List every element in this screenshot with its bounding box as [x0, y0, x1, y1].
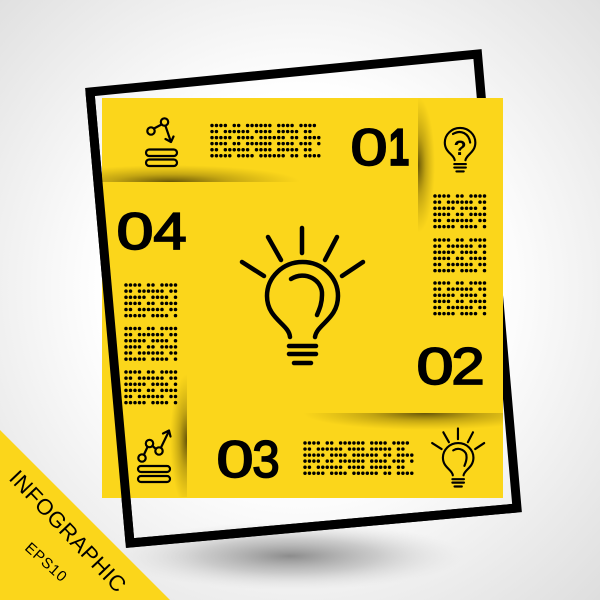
floor shadow [115, 522, 465, 590]
icon 01: nodes and arrow with stacked bars [146, 118, 177, 166]
panel shadow 01 [102, 167, 286, 182]
text placeholder 04 [126, 285, 176, 403]
number 04: 4 [153, 202, 186, 260]
ribbon subtitle: EPS10 [21, 539, 70, 585]
question bulb icon 02 [445, 128, 475, 171]
number 03: 0 [216, 430, 253, 488]
number 02: 2 [451, 338, 484, 396]
number 01: 0 [350, 118, 387, 176]
text placeholder 01 [212, 126, 319, 156]
yellow sheet [102, 98, 503, 498]
corner ribbon [0, 430, 170, 600]
bulb with rays icon 03 [432, 428, 484, 486]
number 03 [216, 430, 280, 488]
black frame [90, 54, 517, 543]
number 04 [116, 202, 186, 260]
number 01 [350, 118, 409, 176]
frame bottom edge [126, 508, 517, 543]
number 02 [416, 338, 484, 396]
number 04: 0 [116, 202, 154, 260]
panel shadow 02 [418, 104, 434, 226]
central light bulb icon [242, 228, 363, 363]
question bulb icon 02: ? [454, 137, 466, 160]
text placeholder 02 [435, 196, 485, 314]
panel shadow 03 [316, 413, 503, 428]
text placeholder 03 [305, 443, 412, 473]
ribbon title: INFOGRAPHIC [4, 465, 131, 597]
panel shadow 04 [172, 381, 187, 497]
icon 04: rising chart with stacked bars [138, 430, 170, 482]
number 01: 1 [388, 118, 409, 176]
number 03: 3 [252, 430, 280, 488]
number 02: 0 [416, 338, 453, 396]
frame left side over the sheet [90, 92, 130, 543]
